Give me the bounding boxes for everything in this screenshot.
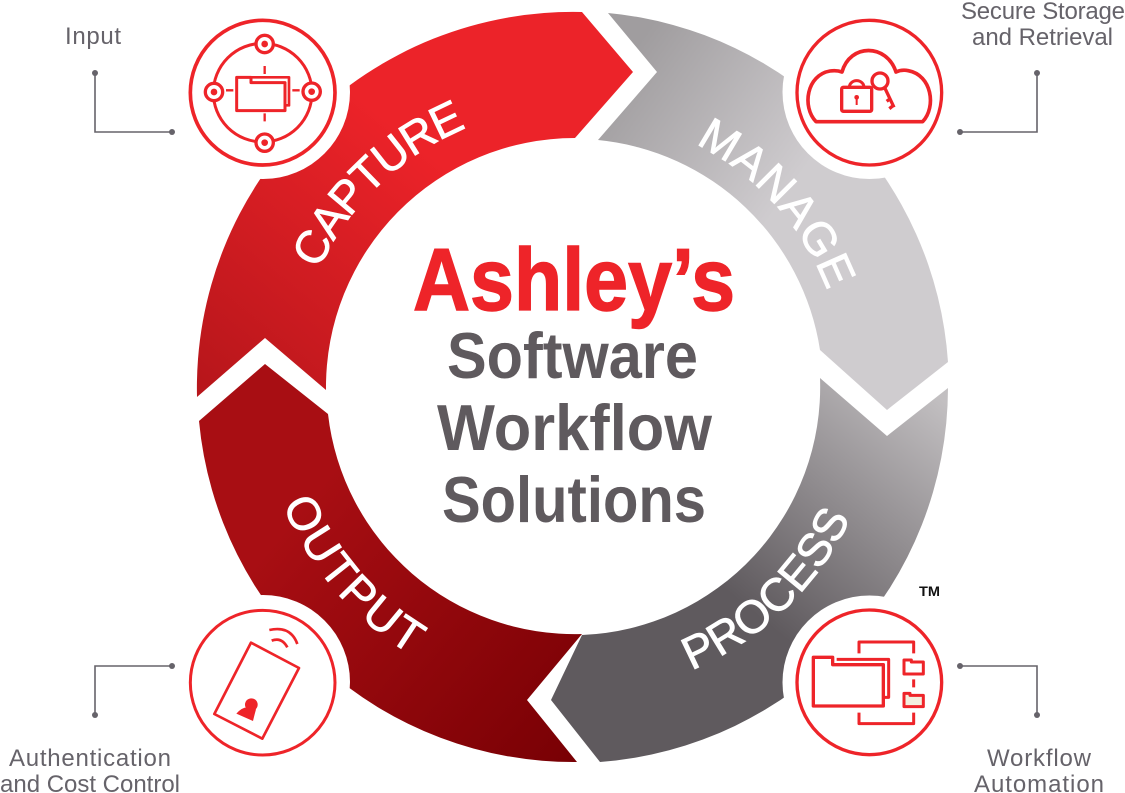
label: authentication and cost control — [0, 745, 180, 793]
icon: access card — [176, 595, 350, 769]
icon: capture input — [176, 5, 350, 179]
segment: capture — [196, 12, 633, 397]
label: workflow automation: Workflow — [987, 745, 1092, 772]
segment: manage — [598, 13, 948, 410]
segment: process — [551, 378, 948, 762]
process label: PROCESS — [680, 508, 847, 670]
leader: authentication — [92, 663, 175, 718]
title line: workflow: Workflow — [437, 391, 712, 464]
label: authentication and cost control: Authentication — [9, 745, 171, 772]
output label: OUTPUT — [287, 497, 428, 650]
center title — [413, 230, 735, 536]
label: secure storage and retrieval: and Retrieval — [972, 24, 1113, 51]
leader: input — [92, 70, 175, 135]
segment: output — [199, 364, 582, 762]
label: workflow automation — [974, 745, 1104, 793]
title line: software: Software — [447, 319, 698, 392]
capture label: CAPTURE — [296, 100, 466, 263]
leader: workflow automation — [957, 663, 1040, 718]
title line: solutions: Solutions — [442, 463, 706, 536]
label: secure storage and retrieval — [961, 0, 1125, 51]
brand name: Ashley’s — [413, 230, 735, 329]
icon: cloud lock and key — [782, 5, 956, 179]
icon: workflow folders — [782, 596, 956, 770]
manage label: MANAGE — [698, 118, 856, 290]
leader: secure storage — [957, 70, 1040, 135]
trademark mark: TM — [919, 583, 940, 599]
label: input: Input — [65, 23, 121, 50]
